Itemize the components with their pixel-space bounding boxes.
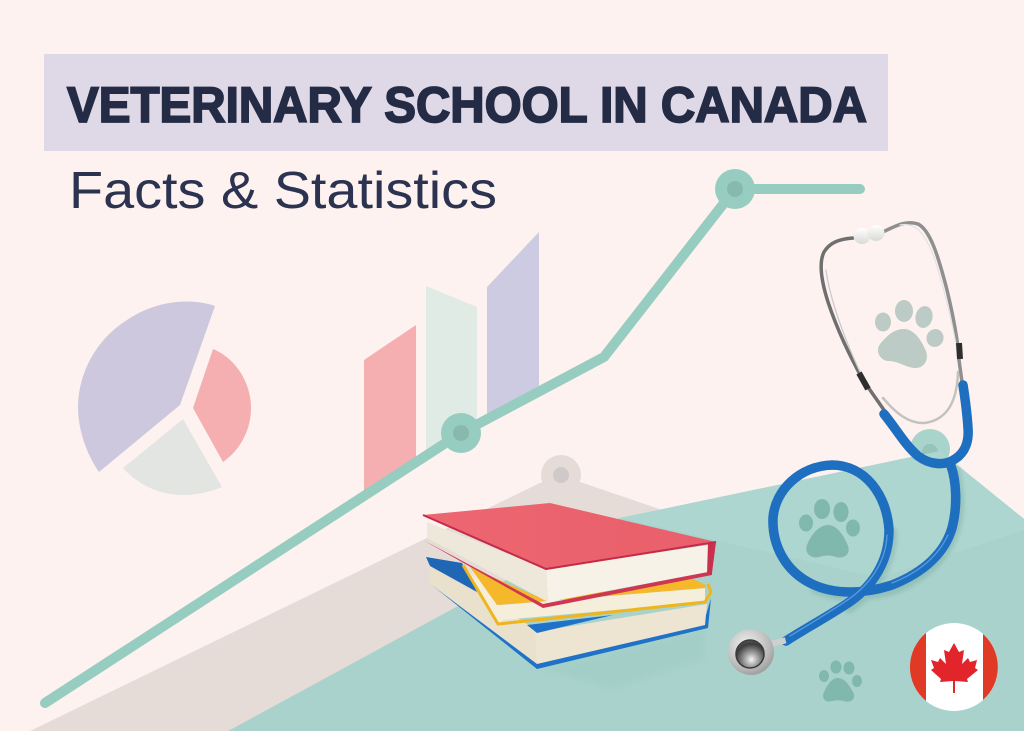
- ear tips: [854, 225, 884, 244]
- pie chart: [78, 302, 251, 495]
- metal headset: [821, 223, 962, 423]
- icon: small paw: [819, 660, 862, 702]
- black clips: [859, 343, 960, 389]
- pie slice: red: [193, 349, 251, 462]
- yellow book: [463, 565, 711, 624]
- chest piece: [728, 629, 786, 675]
- pie slice: lilac: [78, 302, 215, 472]
- bar chart: [364, 232, 539, 496]
- bar: mint: [426, 286, 477, 456]
- illustration: stack of books: [423, 503, 716, 690]
- book reflection: [540, 628, 705, 690]
- tube shadow: [815, 470, 960, 609]
- maple leaf: [931, 643, 978, 693]
- illustration: stethoscope: [728, 223, 968, 675]
- flag bands: [910, 633, 926, 701]
- pie slice: grey: [123, 419, 222, 495]
- title: VETERINARY SCHOOL IN CANADA: [67, 77, 867, 133]
- title banner: [44, 54, 888, 151]
- red book: [423, 503, 716, 608]
- tube highlight: [790, 535, 948, 636]
- bar: red: [364, 325, 416, 496]
- teal floor shape: [228, 429, 1024, 731]
- blue tube: [773, 385, 968, 641]
- icon: paw on pink background: [875, 300, 946, 368]
- icon: Canadian flag: [910, 623, 998, 711]
- icon: paw inside tube loop: [799, 499, 860, 558]
- bar: lilac: [487, 232, 539, 419]
- subtitle: Facts & Statistics: [69, 162, 497, 220]
- blue book: [426, 557, 711, 669]
- trend line with markers: [45, 169, 860, 703]
- beige floor shape: [30, 455, 680, 731]
